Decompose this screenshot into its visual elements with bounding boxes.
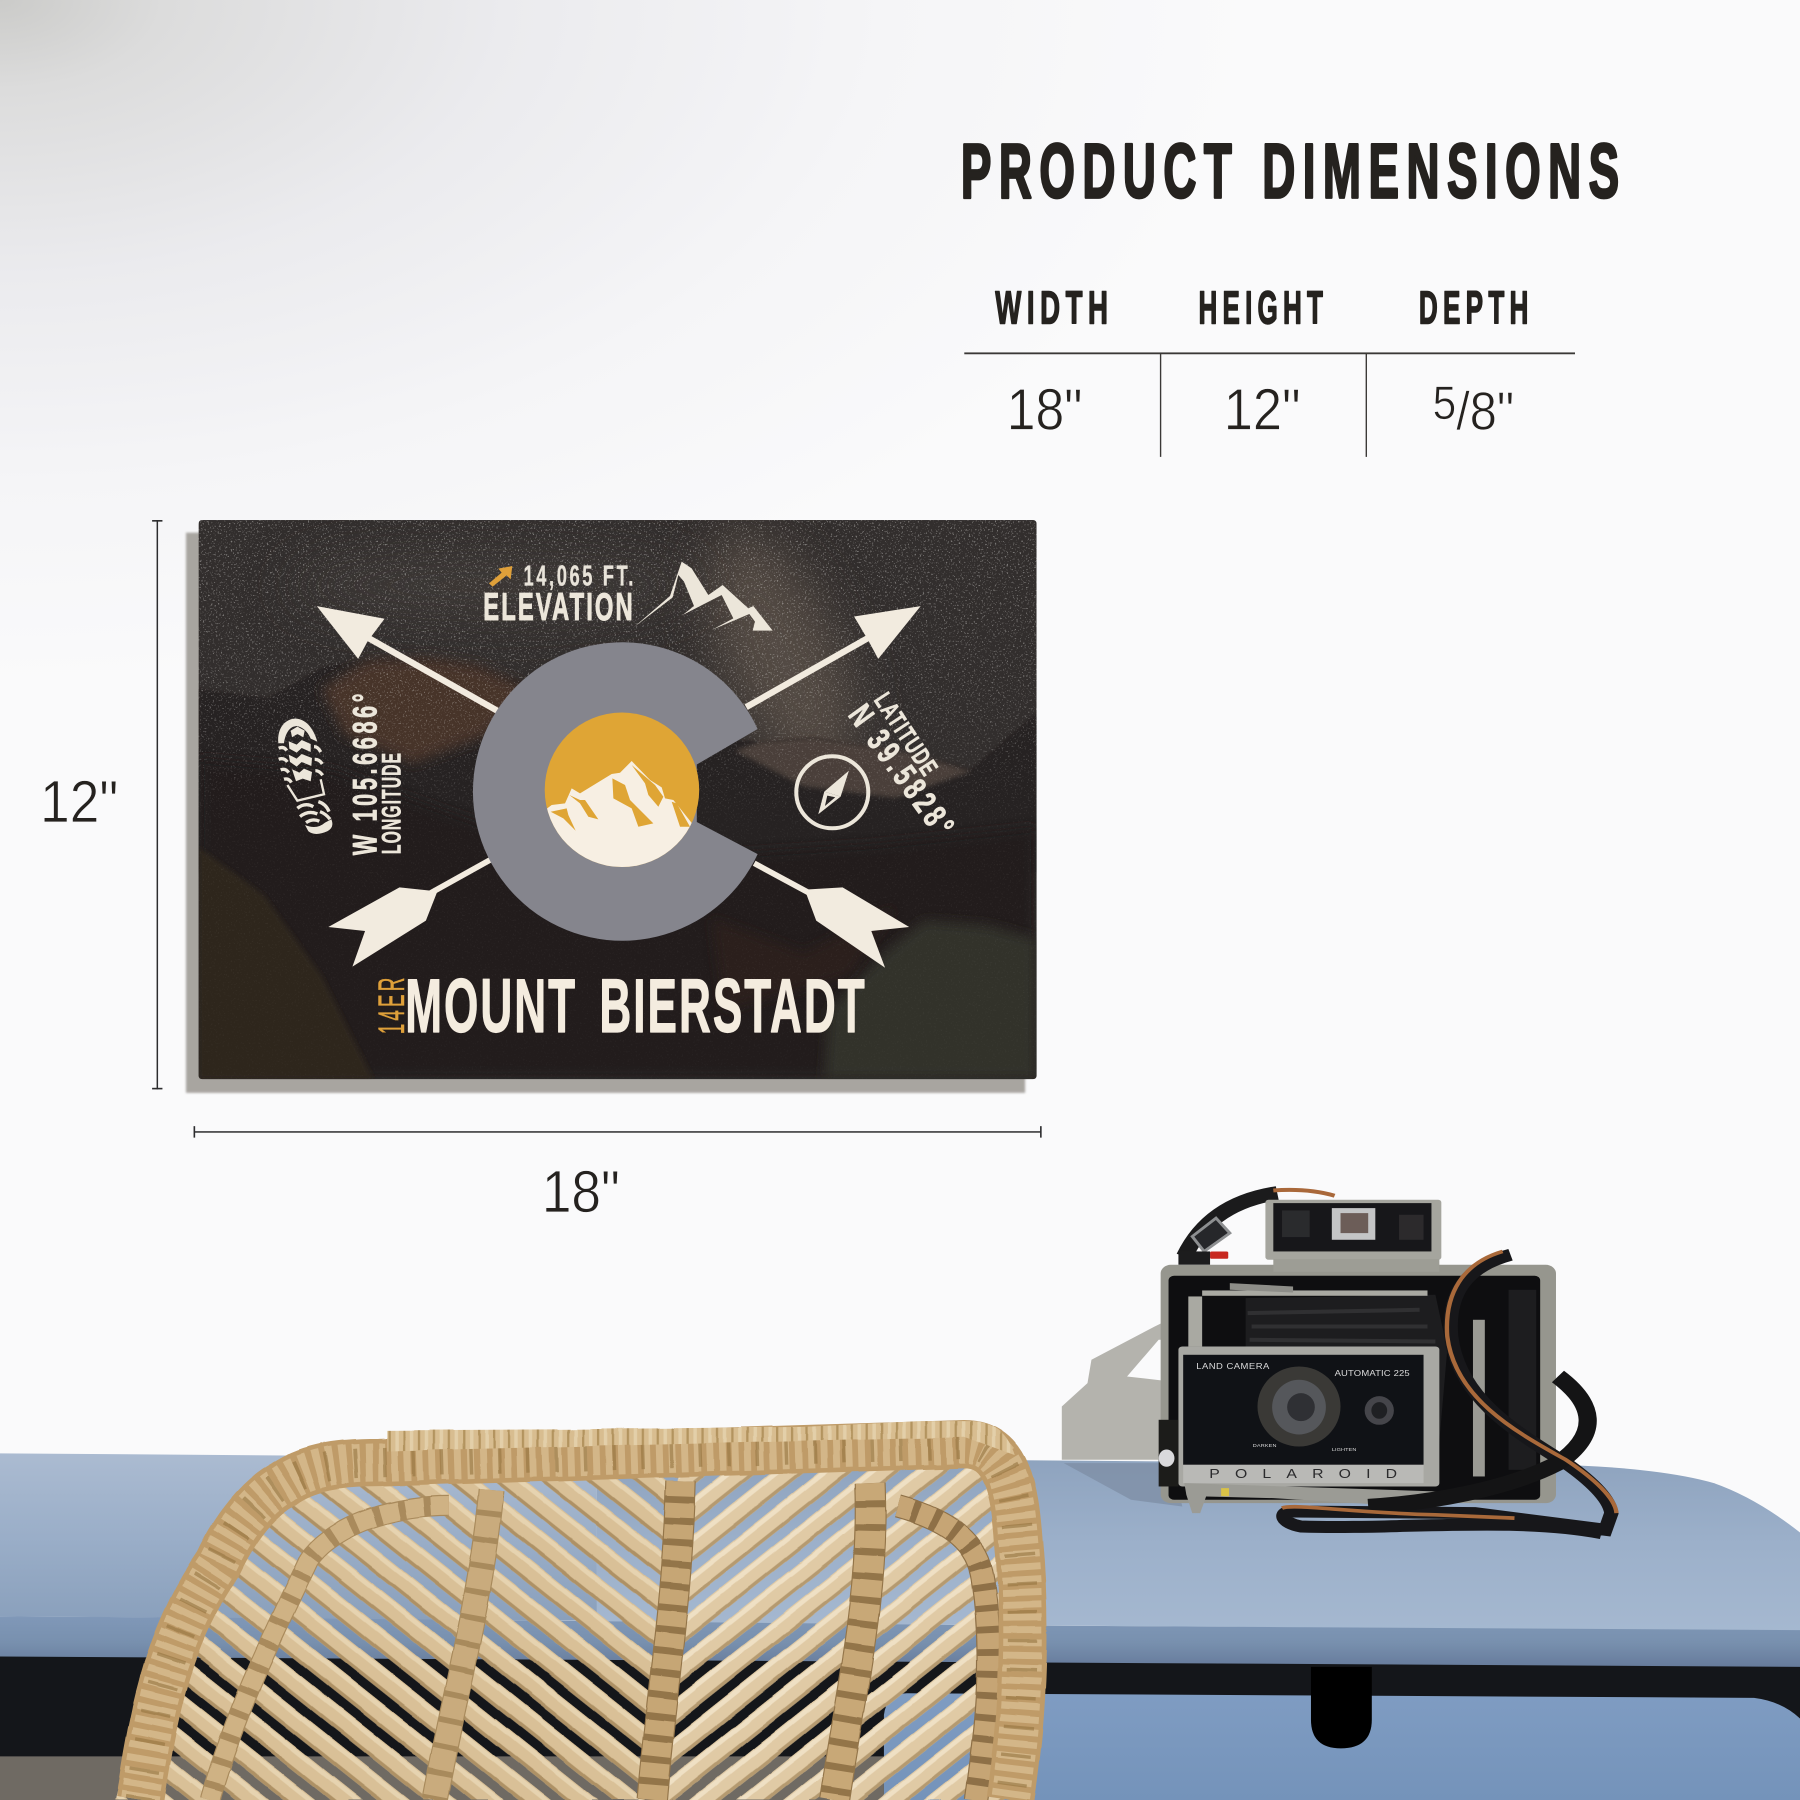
- blue table: [0, 1453, 1800, 1800]
- mount name: MOUNT BIERSTADT: [405, 964, 867, 1049]
- drawer handle notch: [1311, 1667, 1372, 1748]
- elevation block: [483, 560, 773, 631]
- value: depth 5/8 inch: 5: [1433, 376, 1456, 429]
- panel drop shadow: [186, 533, 1025, 1093]
- arrow: north-west: [317, 606, 497, 711]
- viewfinder: [1265, 1200, 1441, 1272]
- label: lighten: LIGHTEN: [1332, 1447, 1357, 1453]
- outer frame: [140, 1444, 1023, 1800]
- strap black upper: [1184, 1193, 1277, 1256]
- light meter: [1365, 1396, 1394, 1425]
- icon: mountain outline: [633, 562, 773, 631]
- label: darken: DARKEN: [1253, 1443, 1277, 1449]
- icon: orange up arrow: [489, 566, 512, 587]
- milky way glow: [695, 524, 870, 743]
- photo: wicker chair back: [103, 1421, 1039, 1800]
- column heading: height: HEIGHT: [1198, 282, 1328, 334]
- dimensions table: [964, 282, 1575, 457]
- column heading: depth: DEPTH: [1419, 282, 1534, 334]
- longitude block: [278, 690, 407, 855]
- base and tripod foot: [1184, 1483, 1437, 1513]
- arrow: north-east: [746, 606, 921, 707]
- label: land camera: LAND CAMERA: [1196, 1361, 1270, 1371]
- latitude label: LATITUDE: [868, 688, 944, 782]
- chevron slats: [115, 1468, 1005, 1800]
- bellows: [1246, 1295, 1447, 1486]
- icon: boot print: [278, 719, 332, 834]
- twisted vertical ribs: [210, 1481, 989, 1800]
- mountains: [199, 658, 1037, 872]
- label: automatic 225: AUTOMATIC 225: [1335, 1368, 1410, 1378]
- photo: instant camera: [1062, 1190, 1616, 1533]
- sun disc with mountain: [544, 712, 700, 867]
- latitude block: [796, 688, 963, 847]
- top band: [387, 1421, 1015, 1456]
- value: height 12 inches: 12": [1224, 377, 1301, 442]
- camera body: [1161, 1265, 1556, 1503]
- front panel: [1178, 1346, 1439, 1486]
- leather strap: [1283, 1255, 1611, 1533]
- crossed arrows: [317, 606, 921, 968]
- brand strip: POLAROID: [1209, 1467, 1397, 1482]
- lens: [1257, 1366, 1341, 1446]
- longitude label: LONGITUDE: [377, 752, 407, 854]
- Colorado C emblem: [473, 642, 758, 941]
- icon: compass: [796, 756, 868, 828]
- elevation value: 14,065 FT.: [523, 560, 636, 592]
- longitude value: W 105.6686°: [347, 690, 385, 855]
- label: 18 inches: 18": [542, 1158, 620, 1225]
- drawer front: [884, 1693, 1800, 1800]
- arrow tail: south-east: [754, 863, 909, 968]
- peak title: [371, 964, 867, 1049]
- arrow tail: south-west: [328, 860, 490, 967]
- label: 12 inches: 12": [40, 768, 118, 835]
- latitude value: N 39.5828°: [841, 698, 963, 847]
- column heading: width: WIDTH: [995, 282, 1114, 334]
- 14er tag: 14ER: [371, 975, 412, 1034]
- camera wall shadow: [1062, 1320, 1174, 1460]
- wood print panel: [199, 510, 1037, 1079]
- elevation label: ELEVATION: [483, 586, 635, 629]
- value: depth 5/8 inch: /8": [1456, 381, 1514, 441]
- value: width 18 inches: 18": [1007, 377, 1083, 442]
- star speckle: [198, 520, 1036, 964]
